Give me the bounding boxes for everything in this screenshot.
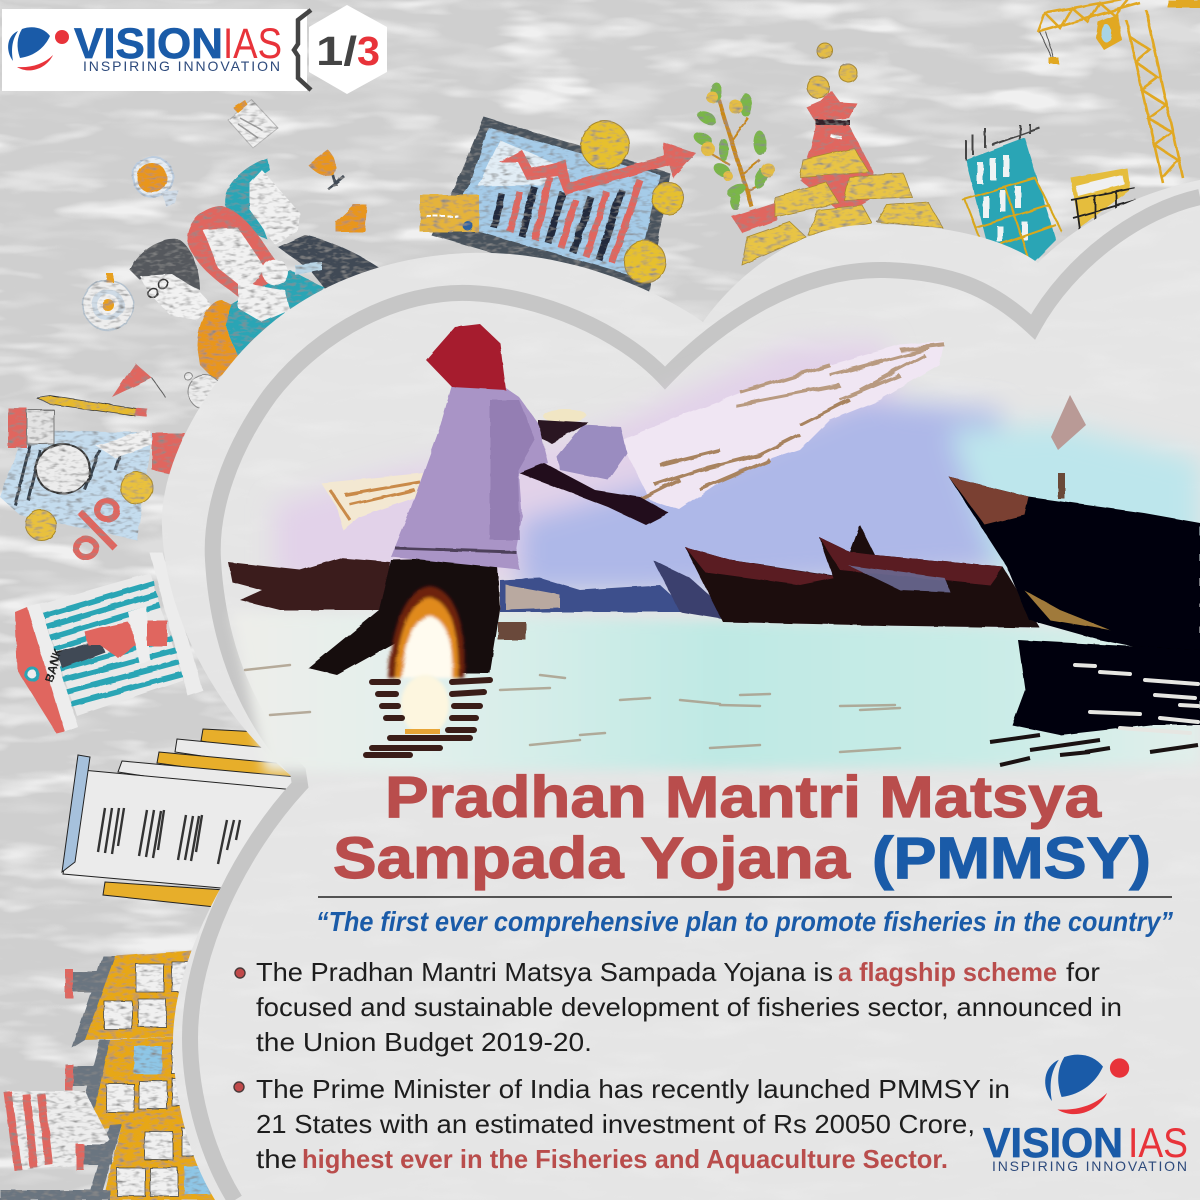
gold bars: [742, 148, 943, 265]
icon: stopwatch: [184, 372, 222, 409]
boat flag: [1051, 395, 1086, 450]
title line 2: Sampada Yojana: [333, 826, 851, 891]
main sheet: [63, 770, 360, 895]
woman with coral hair: [187, 206, 325, 362]
illustration: buildings and crane: [962, 0, 1200, 265]
icons around the people: clipboard, bulb, trophy, gem, target, flag: [83, 100, 367, 409]
crane hook: [1040, 32, 1059, 64]
coins: [581, 121, 684, 283]
bullet point 1: [235, 957, 1122, 1057]
footer globe: [1045, 1055, 1129, 1114]
sky wash: [275, 340, 1200, 592]
bullet marker: [234, 1082, 244, 1092]
title line 1: Pradhan Mantri Matsya: [385, 765, 1102, 830]
logo background: [2, 9, 307, 91]
money bag: [800, 90, 874, 215]
page number red: 3: [357, 28, 380, 74]
coral book: [152, 433, 185, 474]
crane mast: [1126, 10, 1183, 183]
photo: fisherman casting a net at sunset: [228, 324, 1200, 772]
red hood: [426, 324, 506, 390]
panel: scalloped content panel: [162, 180, 1200, 1200]
growth arrow: [499, 142, 696, 195]
logo globe: [8, 27, 69, 70]
tick groups: [98, 808, 240, 864]
illustration: yellow tower blocks: [0, 950, 245, 1200]
plant: [691, 82, 775, 210]
crane cabin: [1096, 14, 1122, 50]
bullet 1 line end: for: [1066, 957, 1100, 987]
water ripples: [245, 665, 900, 752]
page number: 1/: [316, 28, 357, 74]
laptop screen: [445, 128, 660, 277]
logo: Vision IAS bottom right: [983, 1055, 1188, 1174]
man with teal hair: [225, 158, 380, 295]
bullet 2 line 1: The Prime Minister of India has recently launched PMMSY in: [256, 1074, 1010, 1104]
bullet 2 line 2: 21 States with an estimated investment of Rs 20050 Crore,: [256, 1109, 975, 1139]
man with glasses: [130, 239, 240, 380]
icon: gem: [336, 205, 367, 232]
hand holding money bag: [85, 606, 167, 665]
left net: [321, 473, 423, 530]
percent sign: [76, 501, 117, 557]
hanging pouch: [498, 622, 526, 640]
icon: clipboard: [228, 100, 278, 148]
man reflection: [366, 675, 490, 755]
boats: [653, 473, 1200, 660]
logo strapline: INSPIRING INNOVATION: [83, 58, 280, 74]
chart bars: [494, 177, 640, 263]
windows: [104, 962, 206, 1196]
pot: [732, 203, 778, 233]
towers: [72, 956, 120, 1048]
logo wordmark: VISION: [74, 20, 223, 68]
icon: pencil: [37, 396, 147, 417]
logo: Vision IAS header with page marker: [2, 5, 387, 94]
illustration: tax document with coins: [0, 396, 185, 557]
icon: target: [83, 273, 133, 330]
illustration: stacked documents: [62, 729, 370, 915]
laptop frame: [431, 117, 670, 298]
bullet point 2: [234, 1074, 1010, 1174]
shirt: [391, 384, 548, 570]
crane jib: [1038, 0, 1145, 32]
sun glow through legs: [388, 586, 465, 678]
footer wordmark red: IAS: [1128, 1119, 1188, 1166]
blue spine: [62, 755, 90, 872]
cast net: [620, 342, 945, 510]
boat reflection: [990, 640, 1200, 765]
distant shore: [228, 558, 690, 612]
bullet marker: [235, 968, 245, 978]
scaffolding: [962, 178, 1062, 265]
footer wordmark: VISION: [983, 1119, 1123, 1166]
illustration: bank building: [15, 553, 203, 734]
logo wordmark red: IAS: [223, 20, 282, 68]
front arm: [519, 463, 669, 525]
title: [333, 765, 1151, 891]
bank label: BANK: [42, 646, 66, 684]
antennas: [966, 124, 1040, 160]
icon: light bulb: [133, 157, 178, 207]
illustration: money plant and gold bars: [691, 43, 943, 265]
bullet 1 line 2: focused and sustainable development of fisheries sector, announced in: [256, 992, 1122, 1022]
tax sheet: [0, 430, 153, 540]
bullet 1 line 1: The Pradhan Mantri Matsya Sampada Yojana is: [256, 957, 833, 987]
water: [232, 612, 1200, 772]
credit card: [420, 195, 479, 232]
small gold building: [1071, 168, 1130, 228]
bullet 1 highlight: a flagship scheme: [838, 957, 1057, 987]
back sheets: [103, 729, 370, 915]
illustration: three people group: [130, 158, 380, 380]
teal tower: [966, 138, 1056, 263]
title acronym: (PMMSY): [872, 826, 1151, 891]
balcony pipes: [0, 972, 112, 1200]
back arm with disc: [538, 409, 589, 443]
brace: [294, 10, 311, 90]
footer strapline: INSPIRING INNOVATION: [992, 1158, 1187, 1174]
legs: [308, 557, 500, 675]
divider rule: [318, 896, 1172, 898]
bullet 1 line 3: the Union Budget 2019-20.: [256, 1027, 592, 1057]
bullet 2 highlight: highest ever in the Fisheries and Aquaculture Sector.: [302, 1144, 948, 1174]
hexagon badge: [309, 5, 387, 94]
panel band: [190, 197, 1200, 1200]
icon: trophy: [308, 150, 344, 189]
striped side block: [5, 1091, 110, 1170]
fisherman: [308, 324, 669, 678]
falling coins: [807, 43, 857, 98]
illustration: laptop with growth chart: [420, 117, 696, 298]
coins: [26, 472, 153, 540]
icon: red flag: [112, 363, 166, 398]
net bundle and sleeve: [557, 425, 627, 480]
bullet 2 line 3: the: [256, 1144, 297, 1174]
